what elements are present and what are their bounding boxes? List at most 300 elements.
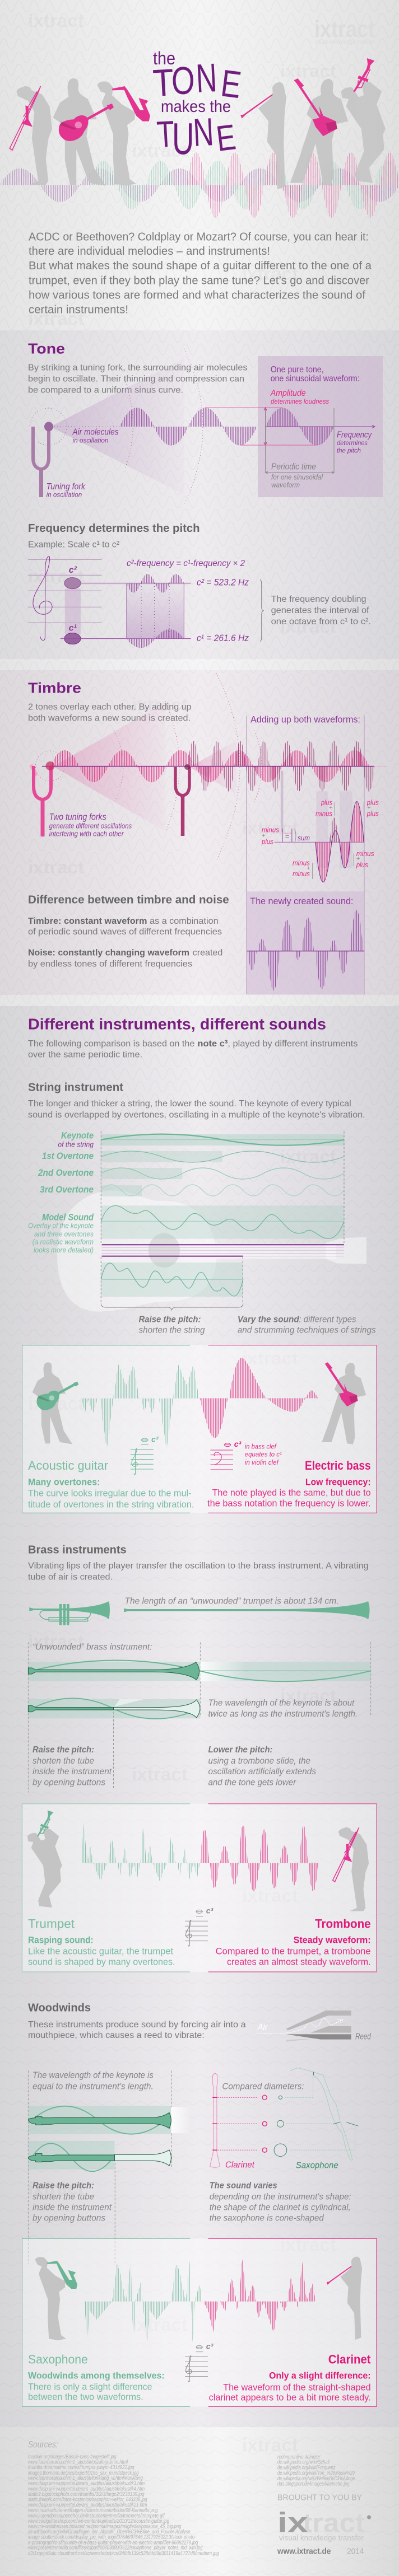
sources list right: rechneronline.de/note/ xyxy=(277,2454,321,2461)
timbre vs noise text: Timbre: constant waveform xyxy=(28,917,147,926)
trumpet text: Trumpet xyxy=(28,1916,75,1930)
string text: The longer and thicker a string, the lower the sound. The keynote of every typical xyxy=(28,1099,351,1109)
panel: frequency xyxy=(28,522,371,648)
icon: reed xyxy=(258,2011,351,2042)
trombone player xyxy=(333,1827,369,1911)
sources list left: static.freepik.com/fotos-kostenlos/saxophon-vektor_643338.jpg xyxy=(28,2496,147,2503)
background: tone section xyxy=(0,330,399,659)
panel: brass instruments xyxy=(28,1544,371,1793)
faint watermarks: ixtract xyxy=(132,141,188,161)
timbre vs noise text: as a combination xyxy=(150,917,219,926)
string text: sound is overlapped by overtones, oscillating in a multiple of the keynote's vibration. xyxy=(28,1110,365,1120)
woodwinds text xyxy=(28,2020,246,2040)
sources list right: das.blogsport.de/images/klarinette.jpg xyxy=(277,2481,350,2488)
title: makes the xyxy=(161,97,231,116)
new sound waveform xyxy=(247,910,364,990)
panel: trumpet vs trombone xyxy=(22,1804,377,1972)
strings xyxy=(102,1245,344,1256)
logo ixtract: tract xyxy=(303,2508,365,2538)
faint watermarks xyxy=(28,11,336,2455)
raise the pitch text: inside the instrument xyxy=(33,1767,112,1776)
title: U xyxy=(172,114,194,164)
comparison text: note c³ xyxy=(197,1039,228,1049)
string text xyxy=(28,1099,365,1120)
panel: string instrument xyxy=(28,1081,376,1335)
sound cone xyxy=(50,358,184,495)
octave text: The frequency doubling xyxy=(271,595,366,604)
notation xyxy=(185,2345,208,2382)
brace xyxy=(260,579,263,642)
amplitude and labels: Air molecules xyxy=(72,428,119,437)
plus and minus labels: minus xyxy=(262,826,279,834)
woodwinds text: mouthpiece, which causes a reed to vibrate: xyxy=(28,2031,205,2040)
newly created sound panel: The newly created sound: xyxy=(250,896,353,906)
panel: tone xyxy=(28,340,383,504)
ghost guitar xyxy=(57,1190,366,1312)
saxophone text: There is only a slight difference xyxy=(28,2381,152,2392)
panel frame xyxy=(22,1345,377,1513)
pitch notes: Raise the pitch: xyxy=(139,1315,201,1325)
sound varies text: the shape of the clarinet is cylindrical, xyxy=(210,2203,351,2212)
sources list left: thumbs.dreamstime.com/z/trumpet-player-4314822.jpg xyxy=(28,2464,134,2471)
icon: trumpet xyxy=(29,1601,110,1625)
timbre text: 2 tones overlay each other. By adding up xyxy=(28,703,192,712)
background: timbre section xyxy=(0,670,399,995)
clarinet text: The waveform of the straight-shaped xyxy=(223,2382,371,2392)
lower the pitch text: Lower the pitch: xyxy=(208,1745,272,1755)
amplitude and labels: One pure tone, xyxy=(271,365,324,375)
heading: instruments: Different instruments, different sounds xyxy=(28,1015,326,1032)
overtone labels: looks more detailed) xyxy=(34,1246,94,1254)
faint watermarks: ixtract xyxy=(132,695,188,715)
heading: string instrument: String instrument xyxy=(28,1081,123,1093)
faint watermarks: ixtract xyxy=(28,2178,84,2199)
timbre vs noise text xyxy=(28,894,229,969)
periodic time marker xyxy=(266,408,334,474)
plus and minus labels: + xyxy=(329,805,332,811)
title: T xyxy=(156,113,175,155)
title: the xyxy=(153,48,175,68)
woodwind wavelength diagrams xyxy=(28,2070,191,2264)
overtone labels: (a realistic waveform xyxy=(33,1237,94,1246)
plus and minus labels: + xyxy=(356,855,360,862)
brought to you by: BROUGHT TO YOU BY xyxy=(277,2493,362,2503)
intro text: ACDC or Beethoven? Coldplay or Mozart? Of course, you can hear it: xyxy=(29,231,369,243)
sources list left: musiker.org/images/Bass/e-bass-freigestellt.jpg xyxy=(28,2453,117,2460)
heading: brass: Brass instruments xyxy=(28,1544,127,1556)
pitch notes: Vary the sound xyxy=(238,1315,300,1325)
pitch notes: shorten the string xyxy=(139,1326,205,1335)
first overtone xyxy=(101,1151,344,1162)
faint watermarks: ixtract xyxy=(28,308,84,329)
panel: guitar vs bass xyxy=(22,1345,377,1513)
plus and minus labels: + xyxy=(262,833,265,839)
title: E xyxy=(214,118,238,159)
amplitude and labels: one sinusoidal waveform: xyxy=(271,374,360,384)
octave text xyxy=(271,595,371,627)
logo top right: visual knowledge transfer xyxy=(315,39,375,45)
keynote caption xyxy=(33,2071,154,2092)
faint watermarks: ixtract xyxy=(280,1147,336,1167)
pink instruments xyxy=(10,58,374,150)
diameter labels: Clarinet xyxy=(225,2161,255,2170)
saxophone text: Woodwinds among themselves: xyxy=(28,2370,165,2381)
half length band xyxy=(28,1698,200,1719)
timbre text: both waveforms a new sound is created. xyxy=(28,714,191,723)
lower the pitch text: oscillation artificially extends xyxy=(208,1767,316,1776)
octave text: generates the interval of xyxy=(271,606,369,615)
faint watermarks: ixtract xyxy=(242,1886,298,1906)
intro text: But what makes the sound shape of a guitar different to the one of a xyxy=(29,260,372,272)
amplitude and labels: for one sinusoidal xyxy=(271,473,323,481)
timbre vs noise text: Difference between timbre and noise xyxy=(28,894,229,906)
note and formula labels: c¹ = 261.6 Hz xyxy=(197,633,249,643)
notation guitar xyxy=(131,1438,154,1475)
sources list left: www.mv-waldhausen.bplaced.net/joomla/images/mitglieder/posaune_45_big.png xyxy=(28,2523,182,2530)
trombone text: Compared to the trumpet, a trombone xyxy=(216,1946,371,1957)
interfering waveforms xyxy=(42,741,387,792)
sound cones xyxy=(53,703,236,831)
lower the pitch text: and the tone gets lower xyxy=(208,1778,296,1787)
third overtone xyxy=(101,1185,344,1196)
guitar text: titude of overtones in the string vibration. xyxy=(28,1499,194,1509)
tuning fork pink xyxy=(31,761,55,836)
overtone bars and waves xyxy=(101,1132,344,1310)
overtone labels: 3rd Overtone xyxy=(40,1184,94,1195)
header waveforms xyxy=(0,152,399,218)
fork caption: generate different oscillations xyxy=(49,821,132,830)
sources list left: www.dasp.uni-wuppertal.de/ars_auditus/akustik/akustik3.htm xyxy=(28,2480,145,2487)
air and reed labels: Reed xyxy=(355,2032,371,2041)
plus and minus labels: minus xyxy=(293,869,310,878)
guitar text: The curve looks irregular due to the mul- xyxy=(28,1488,192,1499)
icon: unwound trumpet xyxy=(124,1601,370,1619)
comparison text xyxy=(28,1039,358,1059)
faint watermarks: ixtract xyxy=(28,1394,84,1414)
overtone labels: Overlay of the keynote xyxy=(28,1221,94,1229)
logo top right: ixtract xyxy=(314,16,375,42)
octave text: one octave from c¹ to c². xyxy=(271,617,371,627)
shortened string model sound xyxy=(101,1263,243,1297)
notation bass xyxy=(211,1443,233,1470)
sources list left: www.dasp.uni-wuppertal.de/ars_auditus/akustik/akustik21.htm xyxy=(28,2502,147,2508)
second overtone xyxy=(101,1168,344,1179)
faint watermarks: ixtract xyxy=(242,2435,298,2455)
raise pitch text: inside the instrument xyxy=(33,2203,112,2212)
amplitude and labels xyxy=(47,365,372,498)
plus and minus labels xyxy=(261,798,379,878)
saxophone text: Saxophone xyxy=(28,2353,88,2367)
header illustration xyxy=(0,58,399,218)
clarinet outline xyxy=(210,2073,220,2167)
timbre vs noise text: by endless tones of different frequencies xyxy=(28,960,192,969)
guitar text: Many overtones: xyxy=(28,1477,100,1488)
notation labels: equates to c¹ xyxy=(245,1451,282,1458)
sources list left: d2t1xqejof9utc.cloudfront.net/screenshots/pics/346db139c528dddf9d3011419a1727d8/medium.jpg xyxy=(28,2550,219,2557)
sound varies text: depending on the instrument's shape: xyxy=(210,2192,351,2201)
clarinet player xyxy=(258,82,286,189)
full length band xyxy=(28,2106,191,2134)
background: footer xyxy=(0,2427,399,2576)
trumpet text xyxy=(28,1916,175,1967)
title: T xyxy=(152,60,175,105)
heading: frequency: Frequency determines the pitch xyxy=(28,522,200,535)
octave wave block xyxy=(127,574,184,648)
sources list right: de.wikipedia.org/wiki/Schall xyxy=(277,2459,330,2466)
clarinet waveform xyxy=(203,2259,316,2333)
newly created sound panel xyxy=(247,891,364,994)
bass waveform xyxy=(200,1358,318,1438)
wavelength caption xyxy=(208,1699,358,1719)
lower the pitch text: using a trombone slide, the xyxy=(208,1756,310,1766)
plus and minus labels: plus xyxy=(321,798,332,807)
staff and notes xyxy=(28,557,191,644)
keynote xyxy=(101,1134,344,1146)
diameter labels: Compared diameters: xyxy=(222,2082,304,2092)
timbre text xyxy=(28,703,192,723)
title: O xyxy=(171,59,194,103)
faint watermarks: ixtract xyxy=(28,566,84,586)
sources list right: de.wikipedia.org/wiki/Frequenz xyxy=(277,2465,336,2471)
brass text: tube of air is created. xyxy=(28,1573,113,1582)
sources list left: static2.bigstockphoto.com/thumbs/3/2/3/large2/3238139.jpg xyxy=(28,2491,145,2498)
plus and minus labels: plus xyxy=(366,809,379,817)
title xyxy=(152,48,244,164)
bass text: the bass notation the frequency is lower. xyxy=(207,1498,371,1509)
fork caption: interfering with each other xyxy=(49,829,124,838)
bass text: The note played is the same, but due to xyxy=(212,1488,371,1498)
panel: woodwinds xyxy=(28,2002,371,2264)
guitar player xyxy=(33,1362,78,1444)
note and formula labels: c²-frequency = c¹-frequency × 2 xyxy=(127,559,245,568)
trumpet text: Like the acoustic guitar, the trumpet xyxy=(28,1946,173,1957)
dotted arcs xyxy=(36,673,262,861)
faint watermarks: ixtract xyxy=(28,1631,84,1652)
sources list right: de.wikipedia.org/wiki/Ton_%28Musik%29 xyxy=(277,2470,355,2476)
wavelength caption: twice as long as the instrument's length. xyxy=(208,1709,358,1719)
sources list left: de.wikibooks.org/wiki/Grundlagen_der_Akustik:_Obert%C3%B6ne_und_Fourier-Analyse xyxy=(28,2528,190,2535)
plus and minus labels: minus xyxy=(293,859,310,867)
guitar waveform xyxy=(81,1364,199,1450)
amplitude and labels: determines loudness xyxy=(271,398,329,405)
comparison text: The following comparison is based on the xyxy=(28,1039,195,1049)
tone intro text: begin to oscillate. Their thinning and compression can xyxy=(28,375,244,384)
sources list left: www.musikschule-wolfhagen.de/instrumente/bilder/08-klarinette.png xyxy=(28,2507,158,2514)
overtone labels: Model Sound xyxy=(42,1212,94,1222)
saxophone text xyxy=(28,2353,165,2402)
sources list left: a-photographic-silhouette-of-a-bass-guitar-player-with-an-electric-amplifier-86092279.jpg xyxy=(28,2539,198,2546)
brass text: Vibrating lips of the player transfer the oscillation to the brass instrument. A vibrating xyxy=(28,1562,369,1571)
heading: timbre: Timbre xyxy=(28,680,81,696)
panel frame xyxy=(22,2238,377,2406)
guitar text xyxy=(28,1458,194,1509)
sources heading: Sources: xyxy=(28,2439,58,2450)
brace xyxy=(101,1303,243,1310)
sources list left: www.presentermedia.com/files/clipart/00003000/3612/saxaphone_player_notes_md_wm.jpg xyxy=(28,2545,203,2551)
heading: tone: Tone xyxy=(28,340,65,357)
sources list left xyxy=(28,2453,219,2557)
trumpet text: Rasping sound: xyxy=(28,1935,94,1946)
plus and minus labels: + xyxy=(367,805,370,811)
trombone player xyxy=(17,86,52,185)
website and year xyxy=(277,2547,364,2556)
intro text: certain instruments! xyxy=(29,303,128,316)
overtone labels xyxy=(28,1130,94,1254)
guitar text: Acoustic guitar xyxy=(28,1458,108,1472)
amplitude and labels: Amplitude xyxy=(270,389,306,398)
keynote caption: equal to the instrument's length. xyxy=(33,2082,154,2092)
trombone text: Trombone xyxy=(315,1916,371,1930)
plus and minus labels: sum xyxy=(298,834,310,842)
amplitude and labels: determines xyxy=(337,439,368,447)
intro text: trumpet, even if they both play the same tune? Let’s go and discover xyxy=(29,274,369,287)
intro text xyxy=(29,231,372,316)
note and formula labels xyxy=(69,559,249,643)
amplitude markers xyxy=(205,408,317,445)
sound varies text xyxy=(210,2181,351,2223)
notation xyxy=(185,1910,208,1946)
musicians and instruments xyxy=(17,78,386,189)
sound varies text: The sound varies xyxy=(210,2181,277,2190)
notation labels xyxy=(151,1435,282,1466)
website and year: 2014 xyxy=(347,2547,364,2556)
pitch notes xyxy=(139,1315,376,1335)
notation labels: c³ xyxy=(151,1435,159,1444)
amplitude and labels: the pitch xyxy=(337,447,361,455)
tuning fork dark xyxy=(175,764,190,836)
example text: Example: Scale c¹ to c² xyxy=(28,540,120,549)
bass player xyxy=(322,1362,366,1444)
saxophone text: between the two waveforms. xyxy=(28,2392,143,2402)
adding up panel frame xyxy=(247,716,364,994)
clarinet player xyxy=(327,2257,362,2340)
footer: sources xyxy=(28,2439,371,2557)
sources list right xyxy=(277,2454,355,2488)
plus and minus labels: minus xyxy=(356,849,374,858)
tone intro text xyxy=(28,363,248,395)
shortened band xyxy=(28,2141,171,2171)
amplitude and labels: in oscillation xyxy=(47,490,82,498)
note and formula labels: c² xyxy=(69,565,77,575)
raise pitch text xyxy=(33,2181,112,2223)
keynote caption: The wavelength of the keynote is xyxy=(33,2071,154,2081)
clarinet text: clarinet appears to be a bit more steady. xyxy=(209,2392,371,2403)
amplitude and labels: waveform xyxy=(271,481,300,489)
guitar player xyxy=(53,78,105,186)
faint watermarks: ixtract xyxy=(242,818,298,838)
notation labels: in violin clef xyxy=(245,1458,279,1466)
overtone labels: of the string xyxy=(58,1140,94,1148)
amplitude and labels: Periodic time xyxy=(271,462,316,471)
amplitude and labels: in oscillation xyxy=(73,437,109,445)
amplitude and labels: Tuning fork xyxy=(47,482,86,492)
faint watermarks: ixtract xyxy=(280,2234,336,2255)
purple explanation panel xyxy=(258,356,383,497)
trumpet text: sound is shaped by many overtones. xyxy=(28,1956,175,1967)
trombone text xyxy=(216,1916,371,1967)
diameter labels xyxy=(222,2082,338,2171)
sources list left: www.laermorama.ch/m1_akustik/tonklang_w.html#tonklang xyxy=(28,2475,143,2481)
raise the pitch text: Raise the pitch: xyxy=(33,1745,94,1755)
faint watermarks: ixtract xyxy=(132,1764,188,1784)
saxophone waveform xyxy=(84,2260,202,2343)
overtone labels: and three overtones xyxy=(34,1229,94,1238)
adding up heading: Adding up both waveforms: xyxy=(250,714,360,725)
plus and minus labels: = xyxy=(285,832,290,840)
sources list left: image.shutterstock.com/display_pic_with_logo/97646/97646,1317925922,3/stock-photo- xyxy=(28,2534,196,2541)
timbre vs noise text: of periodic sound waves of different frequencies xyxy=(28,927,222,937)
tuning fork xyxy=(30,422,53,497)
faint watermarks: ixtract xyxy=(242,264,298,284)
heading: woodwinds: Woodwinds xyxy=(28,2002,91,2014)
wavelength diagrams xyxy=(28,1642,371,1793)
logo ixtract: visual knowledge transfer xyxy=(279,2533,364,2542)
title: E xyxy=(219,62,244,106)
faint watermarks: ixtract xyxy=(280,61,336,81)
length caption: The length of an “unwounded” trumpet is about 134 cm. xyxy=(124,1596,338,1606)
background: instruments section xyxy=(0,1006,399,2427)
saxophone player xyxy=(97,81,136,186)
pure tone waveform xyxy=(119,408,334,446)
woodwinds text: These instruments produce sound by forcing air into a xyxy=(28,2020,246,2030)
bass text: Electric bass xyxy=(305,1458,371,1472)
panel: timbre xyxy=(28,673,387,994)
website and year: www.ixtract.de xyxy=(277,2547,331,2556)
zoomed sum of waves xyxy=(275,771,364,882)
wavelength caption: The wavelength of the keynote is about xyxy=(208,1699,355,1708)
notation label: c³ xyxy=(206,2342,214,2351)
panel: saxophone vs clarinet xyxy=(22,2238,377,2406)
plus and minus labels: + xyxy=(307,865,310,872)
overtone labels: 1st Overtone xyxy=(42,1151,94,1161)
faint watermarks: ixtract xyxy=(280,616,336,637)
bass text xyxy=(207,1458,371,1509)
unwounded caption: “Unwounded” brass instrument: xyxy=(33,1643,152,1652)
panel: instruments intro xyxy=(28,1015,358,1059)
raise the pitch text xyxy=(33,1745,112,1787)
sources list left: www.jugendposaunenchor.de/instrumente/media/trompete/trompete.gif xyxy=(28,2513,165,2519)
clarinet text: Only a slight difference: xyxy=(269,2370,371,2381)
frequency axis xyxy=(266,426,375,428)
sound varies text: the saxophone is cone-shaped xyxy=(210,2214,324,2223)
fork caption: Two tuning forks xyxy=(49,811,106,822)
notation label: c³ xyxy=(206,1906,214,1915)
title: N xyxy=(195,55,218,101)
brass text xyxy=(28,1562,369,1582)
intro text: there are individual melodies – and instruments! xyxy=(29,245,270,258)
trumpet waveform xyxy=(81,1821,200,1881)
faint watermarks: ixtract xyxy=(280,1686,336,1706)
dotted sound arcs xyxy=(30,349,203,504)
air and reed labels: Air xyxy=(257,2023,268,2032)
sources list left: www.laermorama.ch/m1_akustik/oszillogramm.html xyxy=(28,2459,128,2466)
timbre vs noise text: Noise: constantly changing waveform xyxy=(28,948,189,958)
trombone text: creates an almost steady waveform. xyxy=(227,1956,371,1967)
raise pitch text: by opening buttons xyxy=(33,2214,105,2223)
logo ixtract xyxy=(277,2507,371,2542)
air and reed labels xyxy=(257,2023,371,2041)
sources list right: de.wikipedia.org/wiki/Wellenl%C3%A4nge xyxy=(277,2475,355,2482)
amplitude and labels: Frequency xyxy=(337,431,372,440)
intro text: how various tones are formed and what characterizes the sound of xyxy=(29,289,365,301)
plus and minus labels: plus xyxy=(261,837,273,845)
bass player xyxy=(290,79,348,186)
logo ixtract: ix xyxy=(277,2507,308,2538)
compared diameters xyxy=(210,2068,358,2167)
overtone labels: 2nd Overtone xyxy=(38,1167,94,1178)
sources list left: www.dasp.uni-wuppertal.de/ars_auditus/akustik/akustik4.htm xyxy=(28,2486,145,2493)
saxophone outline xyxy=(290,2068,352,2160)
